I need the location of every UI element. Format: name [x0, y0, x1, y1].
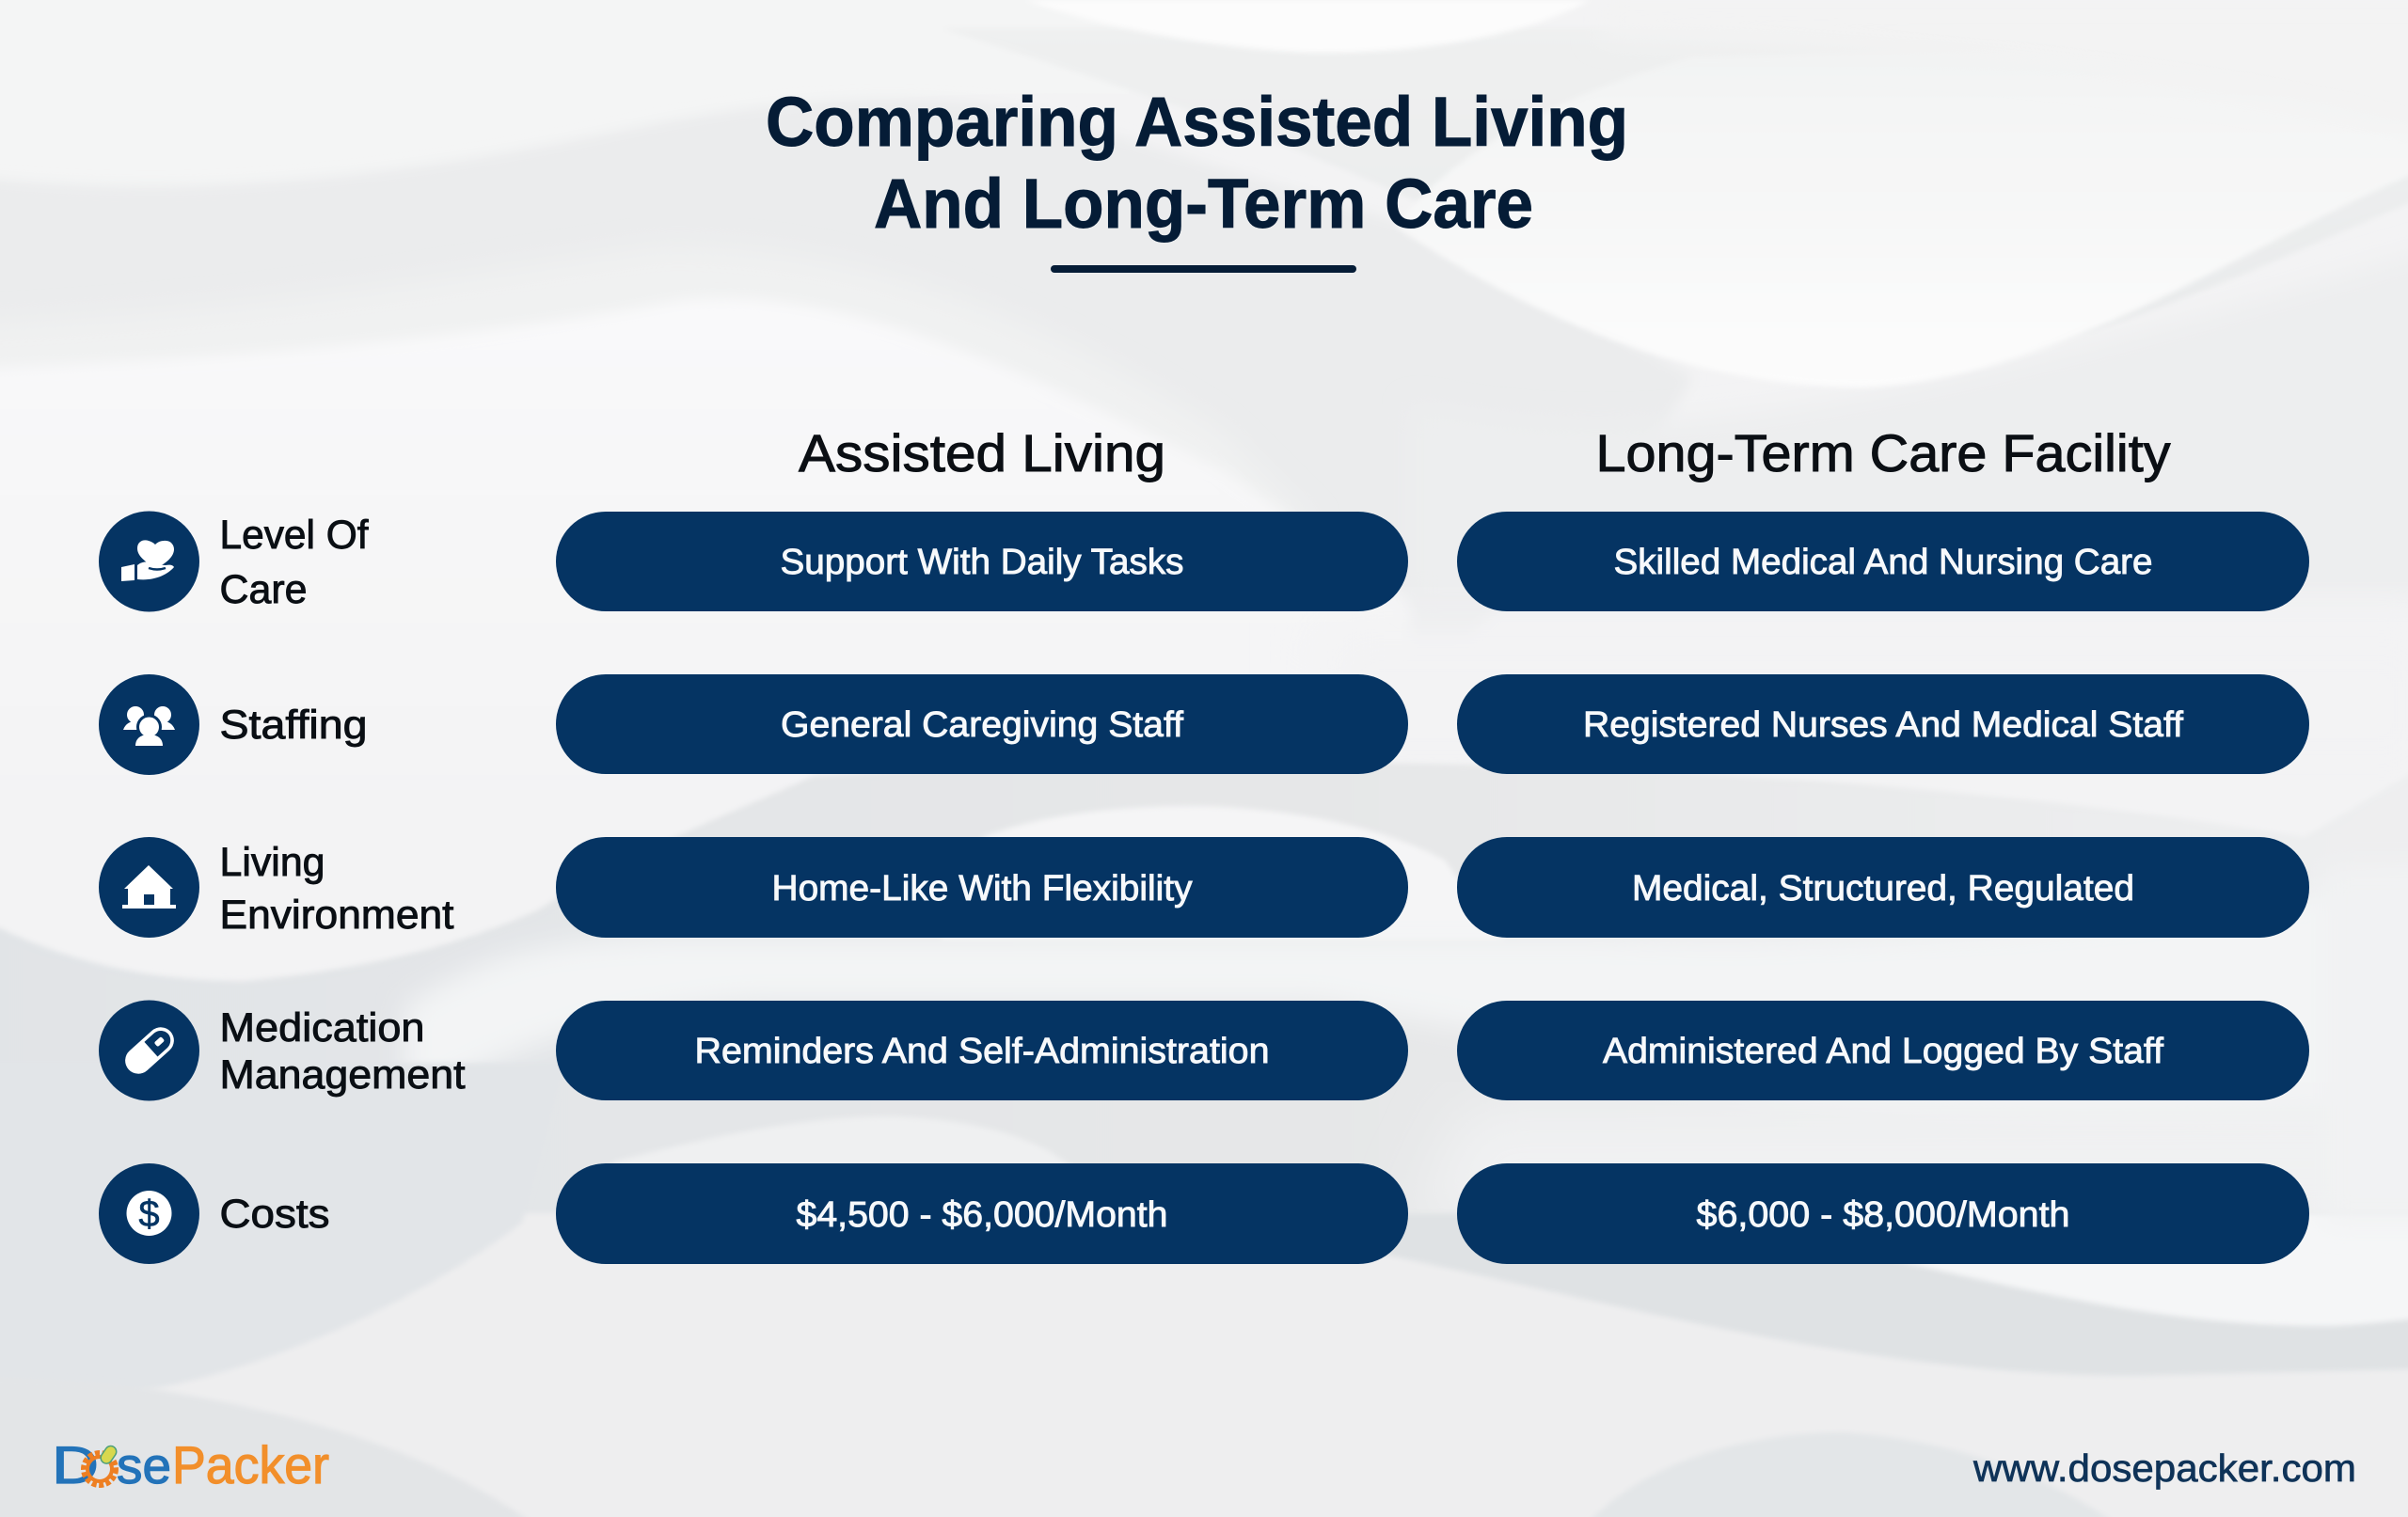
row: level of care	[99, 512, 2309, 612]
label: medication management: Management	[220, 1052, 466, 1098]
icon: capsule	[99, 1001, 199, 1100]
column heading: long-term care facility: Long-Term Care Facility	[1595, 423, 2171, 482]
pill: assisted living environment	[556, 837, 1408, 938]
pill: long-term care level of care	[1457, 512, 2309, 611]
icon: staff group	[99, 674, 199, 775]
logo: DosePacker: se	[117, 1438, 171, 1494]
label: costs: Costs	[220, 1192, 329, 1237]
logo: DosePacker	[52, 1435, 329, 1494]
row: medication management	[99, 1001, 2309, 1100]
pill: assisted living costs: $4,500 - $6,000/Month	[796, 1195, 1168, 1235]
label: medication management	[220, 1005, 466, 1098]
title underline	[1051, 265, 1356, 273]
label: living environment: Living	[220, 840, 325, 885]
icon: dollar coin: $	[138, 1193, 160, 1235]
pill: assisted living level of care	[556, 512, 1408, 611]
pill: long-term care staffing	[1457, 674, 2309, 774]
pill: assisted living costs	[556, 1163, 1408, 1264]
label: staffing: Staffing	[220, 703, 367, 748]
icon: gear with capsule	[84, 1444, 119, 1485]
icon: dollar coin	[99, 1163, 199, 1264]
row: living environment	[99, 837, 2309, 938]
pill: assisted living level of care: Support With Daily Tasks	[781, 543, 1183, 582]
row: costs	[99, 1163, 2309, 1264]
column heading: assisted living: Assisted Living	[799, 423, 1165, 482]
pill: long-term care costs: $6,000 - $8,000/Month	[1697, 1195, 2069, 1235]
logo: DosePacker: D	[52, 1435, 99, 1494]
label: living environment	[220, 840, 454, 938]
row: staffing	[99, 674, 2309, 775]
pill: assisted living medication: Reminders And Self-Administration	[694, 1032, 1270, 1071]
pill: long-term care environment	[1457, 837, 2309, 938]
icon: house	[99, 837, 199, 938]
pill: long-term care medication	[1457, 1001, 2309, 1100]
title: Comparing Assisted Living	[766, 83, 1628, 161]
title: And Long-Term Care	[874, 165, 1533, 243]
pill: long-term care staffing: Registered Nurses And Medical Staff	[1583, 705, 2183, 745]
label: level of care: Level Of	[220, 513, 370, 558]
label: level of care	[220, 513, 370, 612]
website url: www.dosepacker.com	[1972, 1446, 2356, 1490]
pill: assisted living medication	[556, 1001, 1408, 1100]
pill: assisted living staffing	[556, 674, 1408, 774]
pill: long-term care medication: Administered And Logged By Staff	[1603, 1032, 2163, 1071]
icon: hand holding heart	[99, 512, 199, 611]
label: living environment: Environment	[220, 893, 454, 938]
pill: long-term care environment: Medical, Structured, Regulated	[1632, 869, 2134, 909]
title	[766, 83, 1628, 243]
logo: DosePacker: Packer	[172, 1435, 329, 1494]
pill: long-term care costs	[1457, 1163, 2309, 1264]
pill: assisted living staffing: General Caregiving Staff	[781, 705, 1183, 745]
pill: long-term care level of care: Skilled Medical And Nursing Care	[1614, 543, 2152, 582]
label: level of care: Care	[220, 567, 307, 612]
label: medication management: Medication	[220, 1005, 425, 1051]
pill: assisted living environment: Home-Like With Flexibility	[771, 869, 1193, 909]
